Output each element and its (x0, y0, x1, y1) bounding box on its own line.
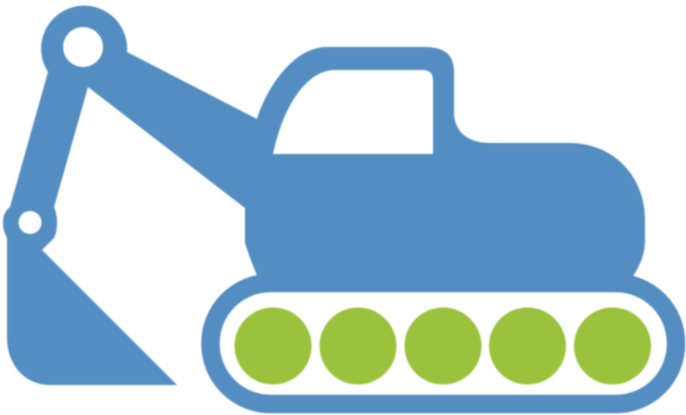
excavator track (210, 283, 676, 404)
wheel 4 (489, 308, 566, 384)
wheel 5 (574, 308, 651, 384)
wheel 1 (234, 308, 312, 384)
wheel 3 (404, 308, 482, 384)
wheel 2 (320, 308, 396, 384)
track wheels (234, 308, 651, 384)
